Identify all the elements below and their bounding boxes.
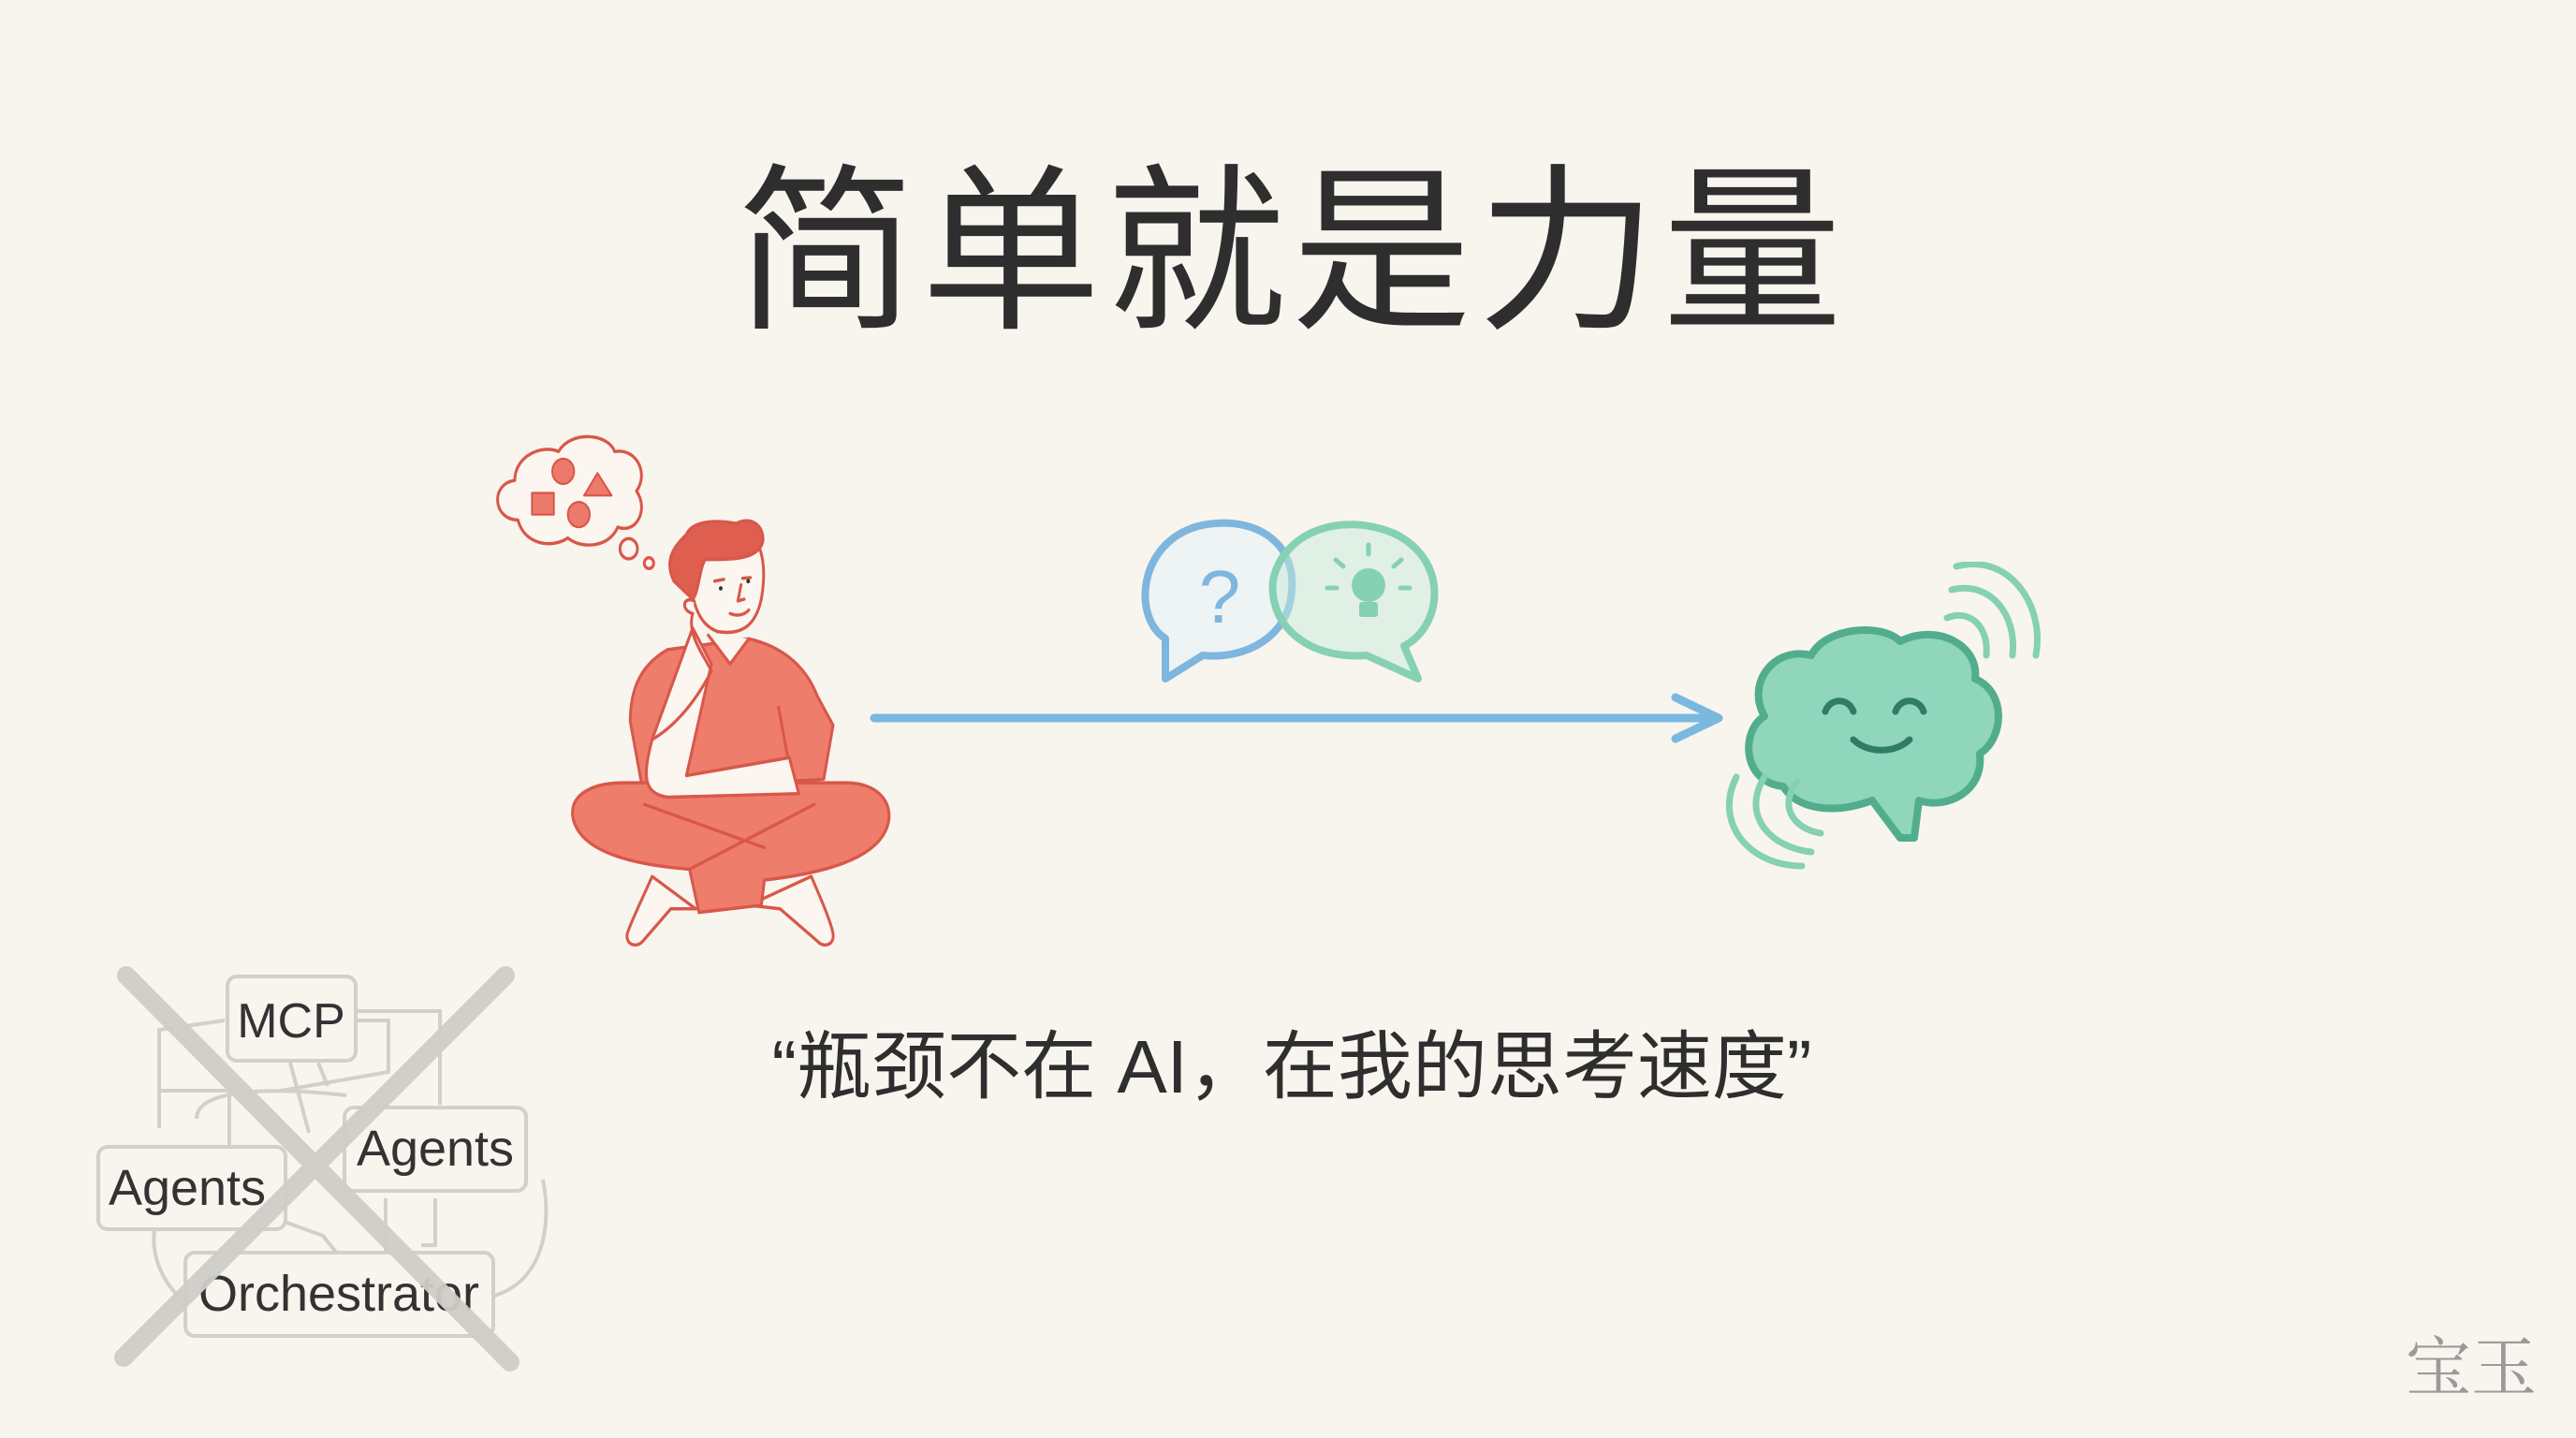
box: Agents right xyxy=(344,1108,526,1191)
box: Orchestrator: Orchestrator xyxy=(198,1266,479,1322)
box: MCP xyxy=(227,976,356,1061)
box: Agents left xyxy=(98,1147,285,1229)
box: Agents right: Agents xyxy=(357,1121,514,1177)
thought cloud xyxy=(498,436,653,568)
bubble: question xyxy=(1145,523,1292,679)
cross-out mark xyxy=(124,976,510,1362)
crossed-out complex diagram xyxy=(96,966,549,1372)
speech bubbles xyxy=(1141,519,1438,682)
box: Orchestrator xyxy=(185,1253,493,1336)
feet xyxy=(627,876,695,945)
icon: happy brain with waves xyxy=(1726,562,2041,869)
signature: 宝玉 xyxy=(2406,1333,2537,1405)
bubble: idea xyxy=(1273,524,1434,679)
box: Agents left: Agents xyxy=(109,1160,266,1216)
illustration: thinking person xyxy=(496,434,891,947)
body xyxy=(573,521,889,945)
arrow xyxy=(871,693,1722,743)
quote: “瓶颈不在 AI，在我的思考速度” xyxy=(771,1025,1812,1108)
title: 简单就是力量 xyxy=(736,152,1848,353)
box: MCP: MCP xyxy=(237,994,345,1049)
bubble: question: ? xyxy=(1199,555,1240,638)
